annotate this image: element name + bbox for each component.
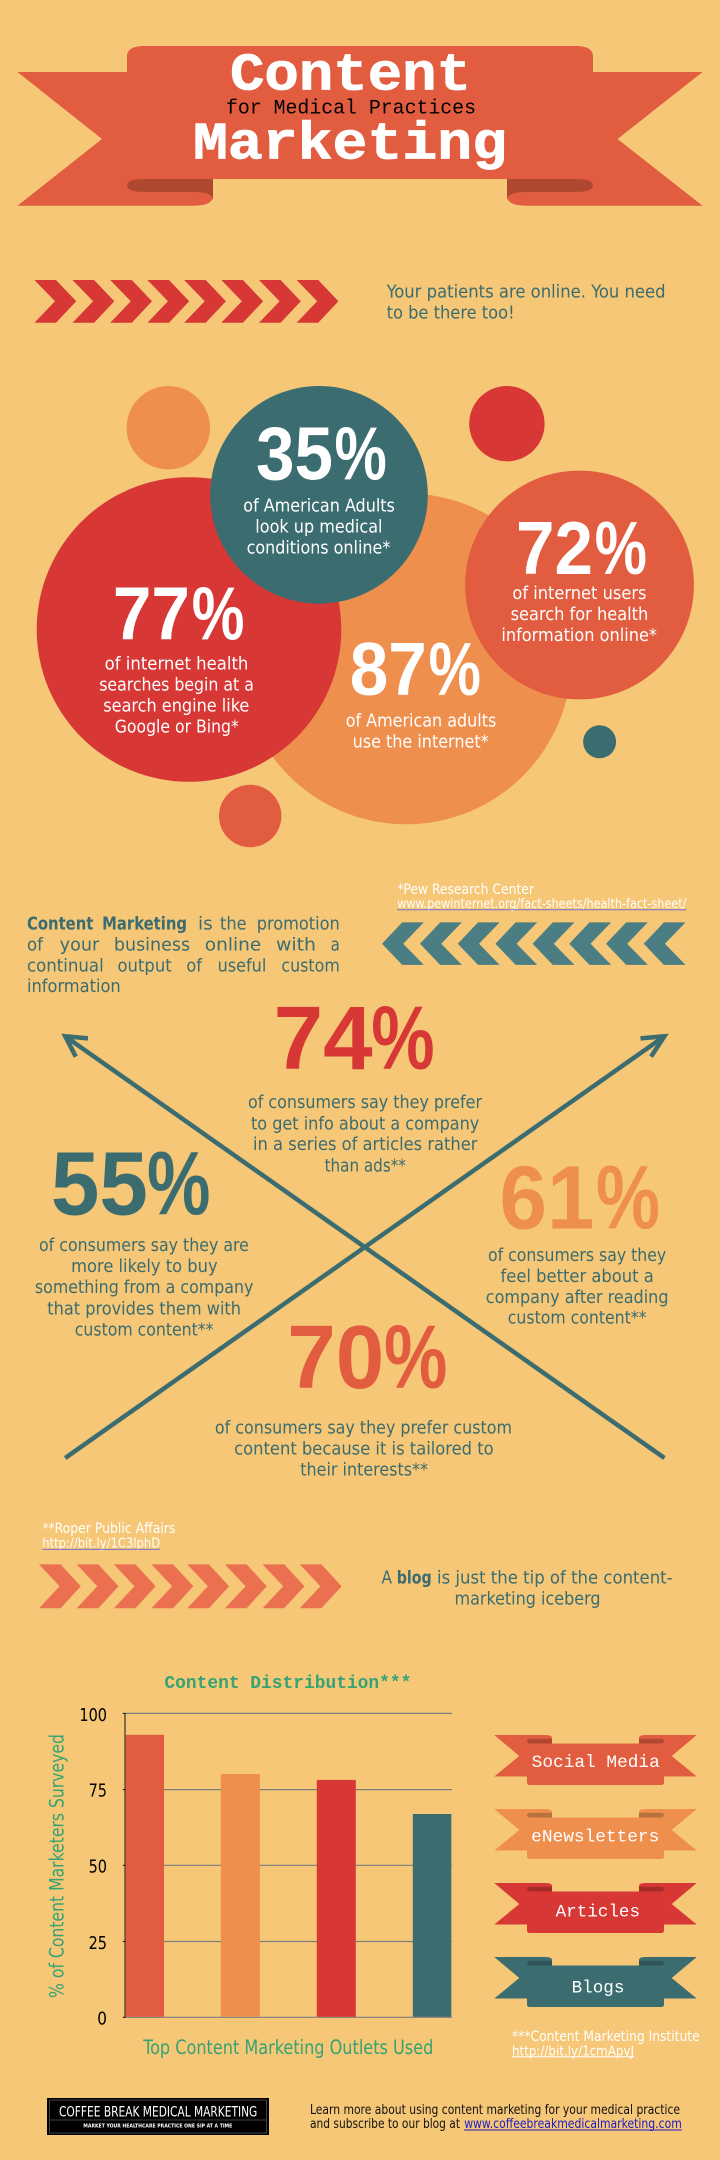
footer call to action	[310, 2102, 682, 2132]
legend ribbon: eNewsletters	[494, 1809, 697, 1859]
stat: 61%: custom content**	[508, 1308, 646, 1329]
content marketing definition: with	[276, 935, 316, 956]
source: Content Marketing Institute	[512, 2029, 700, 2060]
stat: 61%: 61	[500, 1149, 594, 1249]
stat: 55%: custom content**	[75, 1320, 214, 1340]
y axis labels: 100	[79, 1705, 107, 1726]
y axis labels: 0	[97, 2008, 107, 2029]
decorative circle: red	[469, 386, 545, 461]
stat: 55%: 55	[51, 1134, 148, 1234]
source: Content Marketing Institute: http://bit.ly/1cmApvJ	[512, 2045, 634, 2060]
stat: 74%: of consumers say they prefer	[248, 1092, 482, 1113]
y axis labels: 25	[89, 1933, 107, 1954]
bar: articles	[317, 1780, 356, 2017]
source: Pew Research Center	[397, 882, 686, 912]
ribbon right fold	[507, 179, 593, 200]
content marketing definition: the	[220, 913, 247, 934]
stat: 70%: 70	[287, 1308, 384, 1408]
content marketing definition: business	[114, 935, 190, 956]
stat bubble: 35%: 35	[256, 411, 333, 495]
x axis title: Top Content Marketing Outlets Used	[142, 2036, 433, 2059]
stat bubble: 87%: 87	[350, 627, 427, 711]
content marketing definition: Content Marketing	[27, 913, 187, 934]
stat: 74%: in a series of articles rather	[253, 1134, 478, 1155]
bar: blogs	[413, 1814, 451, 2017]
content marketing definition: online	[205, 935, 261, 956]
teal chevron arrow row	[382, 922, 686, 965]
legend ribbon: eNewsletters: eNewsletters	[531, 1827, 659, 1847]
stat bubble: 77%: %	[192, 571, 244, 655]
content marketing definition: is	[198, 913, 213, 934]
content marketing definition: a	[331, 935, 340, 956]
decorative circle: orange	[127, 386, 210, 469]
title ribbon banner	[18, 45, 702, 206]
gridlines	[125, 1713, 452, 2017]
stat: 61%: %	[596, 1149, 660, 1249]
content marketing definition: of	[27, 935, 44, 956]
stat: 55%: more likely to buy	[71, 1256, 218, 1277]
stat bubble: 72%: 72	[516, 506, 593, 590]
stat bubble: 35%: look up medical	[255, 517, 382, 538]
stat: 55%: of consumers say they are	[39, 1235, 249, 1256]
title: Content: Content	[230, 45, 471, 105]
stat: 61%: of consumers say they	[488, 1245, 667, 1266]
content marketing definition: useful	[218, 955, 266, 976]
blog statement: blog	[397, 1567, 432, 1588]
bar: social media	[126, 1735, 164, 2017]
stat: 55%	[35, 1134, 254, 1340]
y axis labels: 50	[89, 1856, 107, 1878]
y axis labels: 75	[89, 1781, 107, 1802]
intro text	[386, 281, 666, 323]
stat bubble: 77%: search engine like	[103, 695, 249, 716]
legend ribbon: Social Media	[494, 1735, 697, 1785]
y axis title: % of Content Marketers Surveyed	[45, 1734, 68, 1998]
y axis	[123, 1713, 125, 2018]
legend ribbon: Social Media: Social Media	[532, 1753, 660, 1773]
logo: Coffee Break Medical Marketing	[47, 2098, 269, 2135]
blog statement: is just the tip of the content-	[437, 1567, 673, 1588]
legend ribbon: Articles: Articles	[556, 1903, 640, 1923]
content marketing definition: custom	[281, 955, 340, 976]
coral chevron arrow row	[39, 1564, 342, 1608]
stat: 61%: company after reading	[486, 1287, 668, 1308]
stat bubble: 87%: use the internet*	[353, 731, 489, 752]
y axis labels	[79, 1705, 107, 2029]
stat: 74%	[248, 989, 482, 1176]
legend ribbon: Blogs: Blogs	[572, 1978, 624, 1998]
source: Pew Research Center: www.pewinternet.org/fact-sheets/health-fact-sheet/	[397, 897, 686, 912]
stat: 70%	[215, 1308, 512, 1480]
stat: 55%: something from a company	[35, 1277, 254, 1298]
stat bubble: 77%: searches begin at a	[99, 674, 254, 695]
chart title: Content Distribution***	[164, 1674, 411, 1694]
crossed arrows	[65, 1036, 664, 1458]
decorative circle: coral	[219, 785, 281, 847]
logo: Coffee Break Medical Marketing: MARKET YOUR HEALTHCARE PRACTICE ONE SIP AT A TIME	[83, 2123, 233, 2129]
content marketing definition: promotion	[257, 913, 340, 934]
stat bubble: 35%: of American Adults	[243, 496, 395, 517]
stat: 70%: content because it is tailored to	[234, 1438, 494, 1459]
stat bubble: 87%: of American adults	[346, 710, 496, 731]
logo: Coffee Break Medical Marketing: COFFEE BREAK MEDICAL MARKETING	[59, 2104, 257, 2121]
arrow: up left	[65, 1036, 664, 1458]
red chevron arrow row	[34, 280, 338, 323]
blog statement: marketing iceberg	[454, 1588, 600, 1609]
content marketing definition	[27, 913, 340, 997]
intro text: Your patients are online. You need	[386, 281, 666, 302]
stat bubble: 35%: conditions online*	[247, 538, 390, 559]
footer call to action: and subscribe to our blog at	[310, 2116, 460, 2132]
stat: 74%: to get info about a company	[251, 1113, 480, 1134]
stat bubble: 35%	[210, 386, 428, 604]
stat bubble: 87%	[240, 493, 572, 824]
blog statement: A	[382, 1567, 392, 1588]
stat bubble: 77%: Google or Bing*	[115, 716, 239, 737]
stat bubble: 77%	[37, 477, 341, 782]
blog statement	[382, 1567, 673, 1609]
bar: enewsletters	[221, 1774, 260, 2017]
content marketing definition: your	[60, 935, 100, 956]
stat: 74%: than ads**	[325, 1155, 406, 1176]
footer call to action: Learn more about using content marketing for your medical practice	[310, 2102, 680, 2118]
title: Marketing: Marketing	[193, 114, 507, 174]
stat: 55%: that provides them with	[47, 1298, 241, 1319]
stat bubble: 35%: %	[334, 411, 387, 495]
source: Roper Public Affairs	[42, 1521, 176, 1552]
stat: 55%: %	[147, 1134, 210, 1234]
stat bubble: 72%: information online*	[501, 625, 657, 646]
stat bubble: 72%: search for health	[511, 604, 648, 625]
intro text: to be there too!	[387, 302, 515, 323]
content marketing definition: of	[186, 955, 203, 976]
stat: 74%: %	[371, 989, 435, 1089]
source: Roper Public Affairs: http://bit.ly/1C3lphD	[42, 1537, 160, 1552]
stat bubble: 72%	[465, 471, 694, 699]
source: Content Marketing Institute: ***Content Marketing Institute	[512, 2029, 700, 2045]
content marketing definition: output	[118, 955, 172, 976]
stat: 61%: feel better about a	[500, 1266, 654, 1287]
stat: 74%: 74	[274, 989, 373, 1089]
source: Pew Research Center: *Pew Research Center	[397, 882, 535, 898]
stat bubble: 77%: 77	[113, 571, 190, 655]
legend ribbon: Blogs	[494, 1957, 697, 2007]
stat bubble: 77%: of internet health	[105, 653, 248, 674]
stat: 70%: of consumers say they prefer custom	[215, 1418, 512, 1438]
stat bubble: 72%: %	[595, 506, 647, 590]
legend ribbon: Articles	[494, 1883, 697, 1933]
decorative circle: teal	[583, 725, 616, 758]
stat: 70%: their interests**	[300, 1460, 428, 1480]
stat bubble: 72%: of internet users	[512, 583, 646, 604]
ribbon left fold	[127, 179, 213, 200]
stat: 61%	[486, 1149, 668, 1329]
subtitle: for Medical Practices	[226, 97, 476, 120]
stat bubble: 87%: %	[429, 627, 481, 711]
footer call to action: www.coffeebreakmedicalmarketing.com	[464, 2116, 682, 2132]
source: Roper Public Affairs: **Roper Public Affairs	[42, 1521, 176, 1537]
arrow: up right	[65, 1036, 664, 1458]
content marketing definition: information	[27, 976, 121, 997]
content marketing definition: continual	[27, 955, 104, 976]
ribbon shape	[18, 46, 702, 206]
bar chart	[45, 1674, 452, 2059]
stat: 70%: %	[384, 1308, 447, 1408]
